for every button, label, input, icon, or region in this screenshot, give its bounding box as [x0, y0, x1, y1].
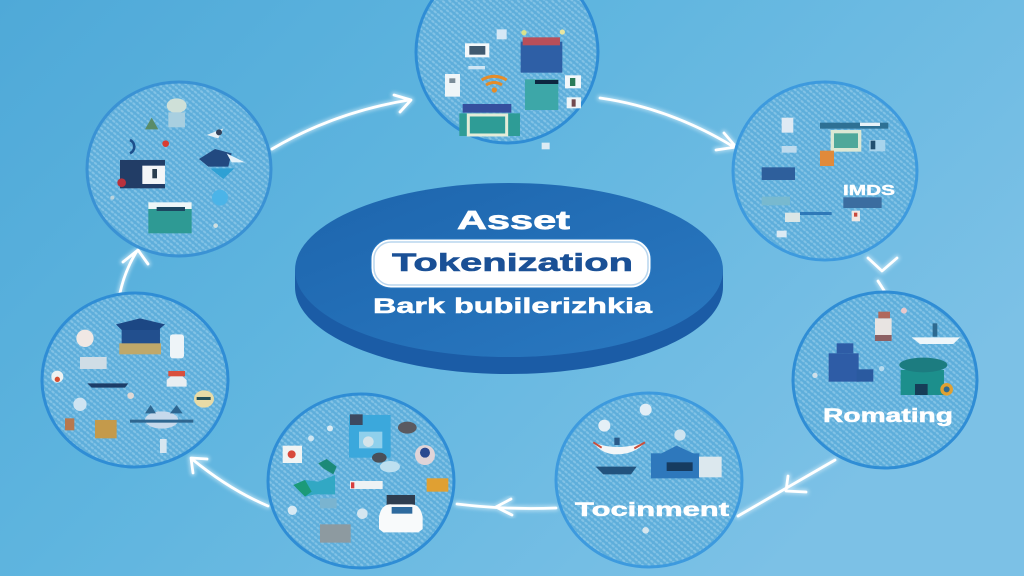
node: lower left	[42, 293, 228, 467]
node: upper right	[733, 82, 917, 260]
arrow: upper right to lower right	[868, 258, 897, 292]
node: upper left	[87, 82, 271, 256]
arrow: upper left to top	[272, 95, 411, 149]
central platform	[295, 183, 723, 374]
node icons: lower left	[51, 318, 214, 453]
platform side	[295, 270, 723, 374]
node icons: top	[445, 29, 581, 149]
node icons: bottom left	[283, 414, 448, 543]
platform top	[295, 183, 723, 357]
node label: lower right: Romating	[823, 406, 953, 427]
node: lower right	[793, 292, 977, 468]
arrow: top to upper right	[600, 98, 736, 150]
node icons: lower right	[812, 308, 960, 396]
pill: Tokenization: Tokenization	[392, 249, 633, 277]
node label: upper right: IMDS	[843, 182, 895, 199]
subtitle: Bark bubilerizhkia	[373, 295, 652, 318]
node: bottom left	[268, 394, 454, 568]
node icons: upper right	[762, 118, 888, 237]
arrow: lower right to bottom right	[738, 460, 835, 516]
arrow: bottom right to bottom left	[457, 499, 556, 515]
arrow: lower left to upper left	[120, 250, 148, 293]
pill: Tokenization	[371, 239, 651, 288]
arrows ring	[120, 95, 897, 516]
node: top	[416, 0, 598, 149]
node: bottom right	[556, 393, 742, 567]
heading: Asset: Asset	[457, 205, 571, 235]
arrow: bottom left to lower left	[191, 458, 268, 506]
node icons: upper left	[110, 98, 245, 233]
node label: bottom right: Tocinment	[575, 500, 730, 521]
node icons: bottom right	[593, 404, 722, 534]
